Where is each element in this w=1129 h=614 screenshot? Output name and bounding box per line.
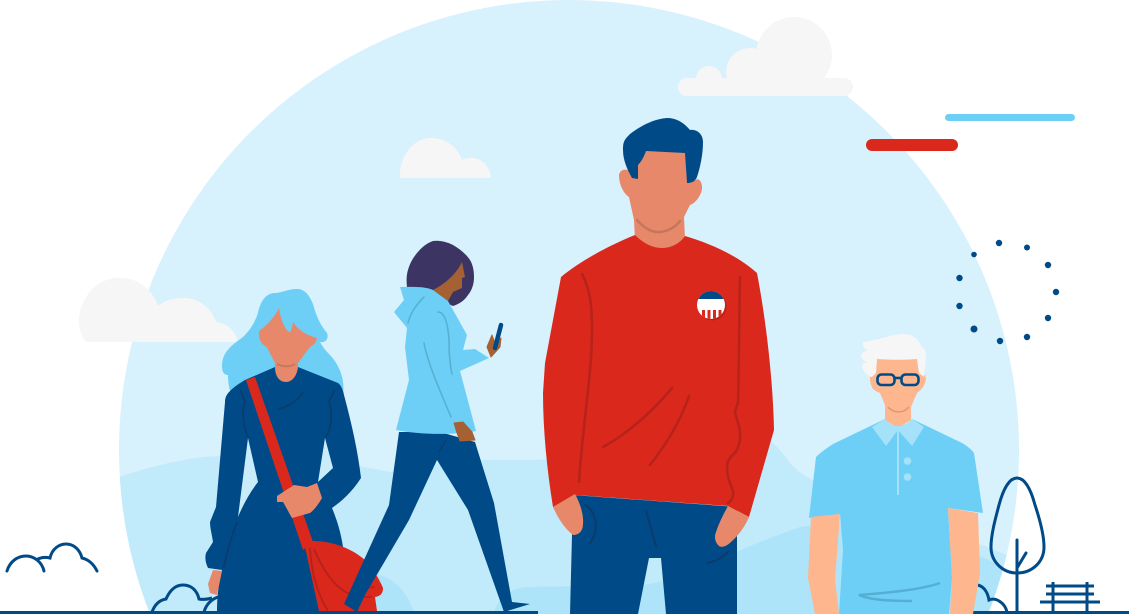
bag lines — [310, 548, 375, 611]
left arm — [808, 514, 840, 614]
right arm — [948, 508, 980, 614]
accent bar: red — [866, 139, 958, 151]
bag — [305, 541, 383, 611]
trouser fold — [439, 440, 446, 452]
sweater — [543, 235, 774, 517]
figure: older man in polo shirt — [808, 334, 983, 614]
hair — [861, 334, 926, 377]
shirt crease — [859, 583, 940, 601]
placket — [897, 430, 899, 495]
glasses — [878, 374, 918, 385]
right hand — [277, 483, 322, 518]
neck shadow — [277, 364, 295, 366]
dress gap: right — [318, 438, 333, 482]
trousers — [570, 495, 737, 614]
bench outline — [1040, 582, 1100, 612]
face and neck — [619, 148, 702, 252]
ground line: right — [973, 611, 1129, 614]
left hand — [208, 570, 222, 595]
dress gap: left — [238, 438, 258, 517]
ground line: left — [0, 611, 538, 614]
hoodie — [394, 287, 489, 434]
hair — [222, 289, 343, 394]
collar — [872, 419, 924, 446]
figure: man in red sweater — [543, 118, 774, 614]
strap — [246, 377, 313, 550]
bush outline: far left — [7, 544, 97, 571]
face and neck — [870, 357, 926, 428]
buttons — [904, 457, 911, 481]
figure: woman with bag — [205, 289, 383, 611]
face — [433, 262, 465, 301]
face and neck — [259, 308, 317, 382]
trousers — [344, 432, 530, 612]
trouser folds — [585, 505, 728, 563]
cloud: top right — [678, 17, 853, 96]
polo shirt — [809, 419, 983, 614]
lower hand — [454, 422, 475, 441]
background circle with hills — [119, 0, 1019, 614]
right hand in pocket — [715, 506, 749, 547]
phone hand — [487, 335, 501, 357]
dotted circle — [956, 240, 1059, 344]
figure: walking woman with phone — [344, 241, 530, 612]
hair — [623, 118, 703, 183]
sweater folds — [579, 274, 740, 503]
hair — [407, 241, 474, 306]
bush outline: right — [978, 585, 1007, 612]
phone — [495, 325, 501, 348]
cloud: left — [79, 278, 238, 342]
dress folds — [224, 391, 334, 567]
tree outline — [991, 478, 1044, 612]
bush outline: by woman — [152, 585, 218, 612]
badge — [696, 290, 726, 320]
left hand in pocket — [553, 494, 583, 535]
neck shadow — [637, 220, 680, 232]
dress — [205, 367, 361, 611]
cloud: centre — [400, 138, 491, 178]
smile — [888, 407, 909, 412]
hoodie folds — [408, 297, 452, 417]
accent bar: blue — [945, 114, 1075, 121]
